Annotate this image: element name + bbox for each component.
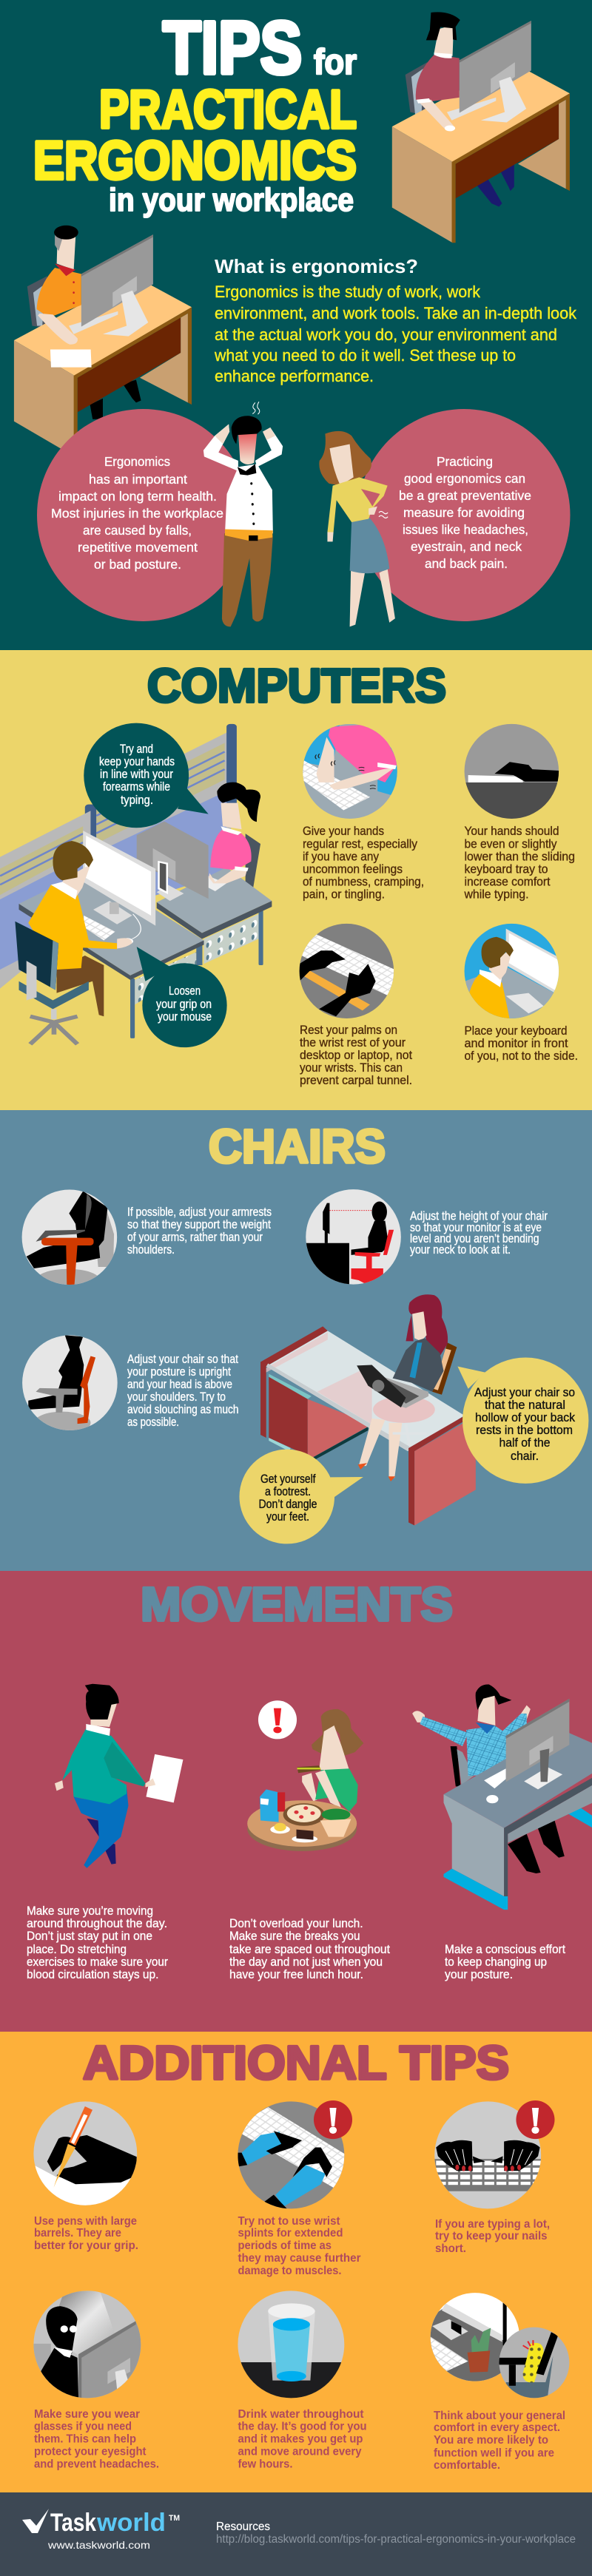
logo: Taskworld: TM (169, 2514, 180, 2523)
text: preventative measure: good ergonomics can (404, 471, 525, 486)
text: general comfort: Think about your general (434, 2410, 565, 2422)
text: keep moving: Don’t just stay put in one (27, 1930, 152, 1943)
text: nails: If you are typing a lot, (435, 2218, 550, 2231)
text: preventative measure: eyestrain, and neck (411, 539, 522, 554)
text: posture changes: Make a conscious effort (445, 1943, 565, 1956)
intro paragraph: environment, and work tools. Take an in-depth look (215, 304, 577, 322)
text: general comfort: function well if you are (434, 2447, 554, 2460)
text: hands rest: regular rest, especially (303, 837, 417, 851)
text: glasses: them. This can help (34, 2433, 136, 2445)
title: PRACTICAL (99, 80, 357, 140)
text: general comfort: comfort in every aspect. (434, 2421, 560, 2434)
text: keep moving: around throughout the day. (27, 1917, 167, 1930)
title (33, 7, 357, 218)
text: preventative measure: and back pain. (425, 556, 508, 571)
icon: alert badge, wrist splints (314, 2100, 352, 2139)
text: glasses (34, 2408, 159, 2471)
text: hand height: Your hands should (465, 824, 559, 838)
speech bubble: natural hollow of back: rests in the bottom (476, 1423, 573, 1437)
text: posture (127, 1353, 238, 1429)
text: keep moving (27, 1904, 168, 1981)
illustration: two colleagues at workstations (0, 724, 272, 1044)
intro paragraph (214, 283, 577, 385)
speech bubble: footrest: Get yourself (260, 1472, 316, 1486)
text: wrist rest: desktop or laptop, not (300, 1048, 412, 1062)
text: hands rest: of numbness, cramping, (303, 874, 424, 889)
text: wrist splints: periods of time as (238, 2239, 332, 2252)
text: health impact: or bad posture. (94, 557, 181, 572)
text: preventative measure: Practicing (437, 454, 493, 469)
logo: Taskworld: www.taskworld.com (47, 2539, 150, 2551)
text: pens: Use pens with large (34, 2215, 137, 2228)
text: hand height: keyboard tray to (465, 862, 548, 876)
icon: glasses (32, 2289, 144, 2400)
circle: preventative measure (358, 409, 570, 621)
icon: comfortable desk setup (430, 2292, 520, 2382)
text: wrist splints: Try not to use wrist (238, 2215, 340, 2228)
text: wrist splints (238, 2215, 361, 2277)
text: keyboard placement (465, 1024, 578, 1063)
text: armrests: so that they support the weight (127, 1218, 271, 1231)
panel: additional tips (0, 2032, 592, 2492)
heading: computers: COMPUTERS (147, 659, 446, 712)
illustration: worker at desk, left (14, 226, 192, 456)
text: posture: avoid slouching as much (127, 1403, 238, 1416)
text: wrist splints: splints for extended (238, 2227, 343, 2239)
icon: upright posture (22, 1335, 118, 1434)
heading: chairs: CHAIRS (209, 1120, 386, 1173)
panel: chairs (0, 1110, 592, 1571)
speech bubble: keep hands in line (84, 723, 209, 828)
intro paragraph: Ergonomics is the study of work, work (215, 283, 481, 301)
speech bubble: natural hollow of back: that the natural (485, 1398, 565, 1412)
speech bubble: natural hollow of back: hollow of your back (475, 1410, 575, 1424)
speech bubble: keep hands in line: in line with your (100, 768, 173, 781)
text: wrist rest: your wrists. This can (300, 1061, 403, 1075)
text: lunch: have your free lunch hour. (229, 1968, 363, 1981)
speech bubble: loosen grip (137, 947, 227, 1047)
text: posture: your shoulders. Try to (127, 1390, 226, 1404)
speech bubble: loosen grip: Loosen (169, 984, 201, 998)
text: glasses: and prevent headaches. (34, 2458, 159, 2471)
text: hand height: while typing. (464, 888, 528, 901)
text: lunch: Make sure the breaks you (229, 1930, 360, 1943)
text: hands rest (303, 824, 424, 901)
icon: pen grip (32, 2100, 140, 2207)
panel: computers (0, 650, 592, 1110)
text: keep moving: place. Do stretching (27, 1943, 127, 1956)
text: health impact: Ergonomics (104, 454, 170, 469)
text: health impact: has an important (89, 472, 187, 487)
text: preventative measure: be a great preventative (399, 488, 531, 503)
speech bubble: natural hollow of back: Adjust your chair so (474, 1385, 575, 1399)
text: health impact (51, 454, 223, 572)
text: water: few hours. (238, 2458, 293, 2471)
text: pens: better for your grip. (34, 2239, 138, 2252)
title: TIPS (163, 7, 302, 89)
icon: monitor in front (464, 923, 560, 1019)
text: general comfort: comfortable. (434, 2459, 500, 2472)
text: armrests: shoulders. (127, 1243, 175, 1257)
text: lunch: Don’t overload your lunch. (229, 1917, 363, 1930)
text: pens: barrels. They are (34, 2227, 121, 2239)
intro paragraph: what you need to do it well. Set these up to (214, 346, 516, 365)
text: chair height: Adjust the height of your chair (410, 1210, 548, 1223)
text: lunch: the day and not just when you (229, 1955, 383, 1969)
speech bubble: keep hands in line: typing. (121, 794, 153, 807)
text: health impact: are caused by falls, (83, 523, 192, 538)
text: keyboard placement: and monitor in front (465, 1036, 568, 1050)
icon: armrest adjustment (21, 1189, 118, 1291)
text: general comfort: You are more likely to (434, 2434, 548, 2447)
panel: introduction (0, 0, 592, 650)
text: water: and it makes you get up (238, 2433, 363, 2445)
speech bubble: natural hollow of back: chair. (511, 1449, 539, 1463)
text: armrests: If possible, adjust your armrests (127, 1206, 272, 1219)
text: posture changes: to keep changing up (445, 1955, 547, 1969)
speech bubble: natural hollow of back: half of the (499, 1436, 551, 1450)
logo: Taskworld: world (96, 2509, 166, 2537)
speech bubble: footrest: a footrest. (265, 1484, 311, 1498)
text: hands rest: uncommon feelings (303, 862, 403, 876)
speech bubble: loosen grip: your mouse (158, 1010, 212, 1024)
illustration: woman with back pain (319, 431, 395, 626)
speech bubble: keep hands in line: Try and (120, 743, 153, 756)
illustration: stressed man (204, 402, 283, 626)
text: hands rest: Give your hands (303, 824, 384, 838)
text: water: Drink water throughout (238, 2408, 364, 2421)
text: posture: and your head is above (127, 1378, 232, 1391)
text: chair height: level and you aren’t bending (410, 1232, 539, 1245)
text: armrests (127, 1206, 272, 1257)
text: keep moving: blood circulation stays up. (27, 1968, 158, 1981)
text: health impact: impact on long term health. (58, 489, 217, 504)
text: water: the day. It’s good for you (238, 2420, 367, 2433)
text: lunch (229, 1917, 390, 1981)
text: water (238, 2408, 367, 2471)
icon: wrist splints (236, 2100, 347, 2211)
intro heading: What is ergonomics? (215, 255, 418, 277)
speech bubble: footrest: Don’t dangle (259, 1497, 317, 1511)
text: glasses: glasses if you need (34, 2420, 132, 2433)
logo: Taskworld (22, 2509, 180, 2551)
panel: footer (0, 2492, 592, 2576)
text: posture: as possible. (127, 1416, 179, 1429)
text: hand height: be even or slightly (465, 837, 557, 851)
illustration: man stretching at standing desk (412, 1684, 592, 1910)
text: pens (34, 2215, 138, 2252)
illustration: man walking with papers (55, 1684, 183, 1868)
text: keep moving: exercises to make sure your (27, 1955, 168, 1969)
illustration: worker at desk, top right (392, 12, 570, 243)
text: glasses: protect your eyesight (34, 2445, 147, 2458)
text: chair height (410, 1210, 548, 1257)
text: hands rest: if you have any (303, 849, 379, 864)
illustration: woman at glass desk with laptop (260, 1294, 476, 1526)
text: nails: short. (435, 2242, 466, 2255)
text: posture changes (445, 1943, 565, 1981)
text: posture: your posture is upright (127, 1365, 231, 1379)
text: keyboard placement: of you, not to the side. (465, 1049, 578, 1063)
speech bubble: footrest: your feet. (266, 1510, 309, 1524)
illustration: woman with oversized lunch (247, 1700, 363, 1851)
text: keyboard placement: Place your keyboard (465, 1024, 567, 1038)
logo: Taskworld: Task (50, 2509, 96, 2537)
icon: short nails (434, 2100, 543, 2211)
text: health impact: Most injuries in the workplace (51, 506, 223, 521)
speech bubble: keep hands in line: keep your hands (99, 755, 175, 768)
text: glasses: Make sure you wear (34, 2408, 140, 2421)
intro paragraph: enhance performance. (215, 367, 374, 385)
icon: lumbar support (498, 2326, 570, 2399)
icon: alert badge, short nails (516, 2100, 554, 2139)
text: hand height: lower than the sliding (465, 849, 575, 864)
resources: http://blog.taskworld.com/tips-for-practical-ergonomics-in-your-workplace (216, 2533, 576, 2546)
text: water: and move around every (238, 2445, 362, 2458)
text: hands rest: pain, or tingling. (303, 888, 385, 901)
icon: chair height and monitor level (305, 1189, 402, 1285)
resources (216, 2521, 576, 2546)
text: health impact: repetitive movement (78, 540, 198, 555)
text: wrist splints: they may cause further (238, 2252, 361, 2265)
text: posture: Adjust your chair so that (127, 1353, 238, 1366)
text: hand height (464, 824, 575, 901)
text: preventative measure: measure for avoiding (403, 505, 525, 520)
icon: tingling hands (302, 724, 398, 820)
text: wrist rest: Rest your palms on (300, 1023, 397, 1037)
text: general comfort (434, 2410, 565, 2472)
resources: Resources (216, 2521, 270, 2533)
text: chair height: so that your monitor is at eye (410, 1221, 542, 1234)
heading: additional tips: ADDITIONAL TIPS (83, 2036, 509, 2089)
speech bubble: loosen grip: your grip on (156, 998, 212, 1011)
text: lunch: take are spaced out throughout (229, 1943, 390, 1956)
icon: palms on wrist rest (298, 923, 396, 1019)
speech bubble: keep hands in line: forearms while (103, 780, 170, 794)
text: wrist splints: damage to muscles. (238, 2265, 342, 2277)
title: for (314, 43, 357, 82)
text: preventative measure (399, 454, 531, 571)
speech bubble: footrest (239, 1450, 363, 1544)
intro paragraph: at the actual work you do, your environment and (215, 325, 557, 344)
icon: hand level with keyboard tray (464, 723, 560, 820)
title: ERGONOMICS (33, 131, 357, 191)
text: chair height: your neck to look at it. (410, 1243, 511, 1257)
text: armrests: of your arms, rather than your (127, 1231, 263, 1244)
speech bubble: natural hollow of back (457, 1358, 588, 1484)
text: nails: try to keep your nails (435, 2230, 548, 2242)
heading: movements: MOVEMENTS (141, 1578, 453, 1631)
text: hand height: increase comfort (465, 874, 551, 889)
text: keep moving: Make sure you’re moving (27, 1904, 153, 1918)
circle: health impact (37, 409, 249, 621)
text: nails (435, 2218, 550, 2255)
text: preventative measure: issues like headaches, (403, 522, 528, 537)
panel: movements (0, 1571, 592, 2032)
title: in your workplace (109, 182, 354, 218)
text: wrist rest: the wrist rest of your (300, 1035, 406, 1049)
text: wrist rest: prevent carpal tunnel. (300, 1073, 412, 1087)
icon: glass of water (236, 2289, 347, 2399)
text: wrist rest (300, 1023, 412, 1087)
text: posture changes: your posture. (445, 1968, 513, 1981)
